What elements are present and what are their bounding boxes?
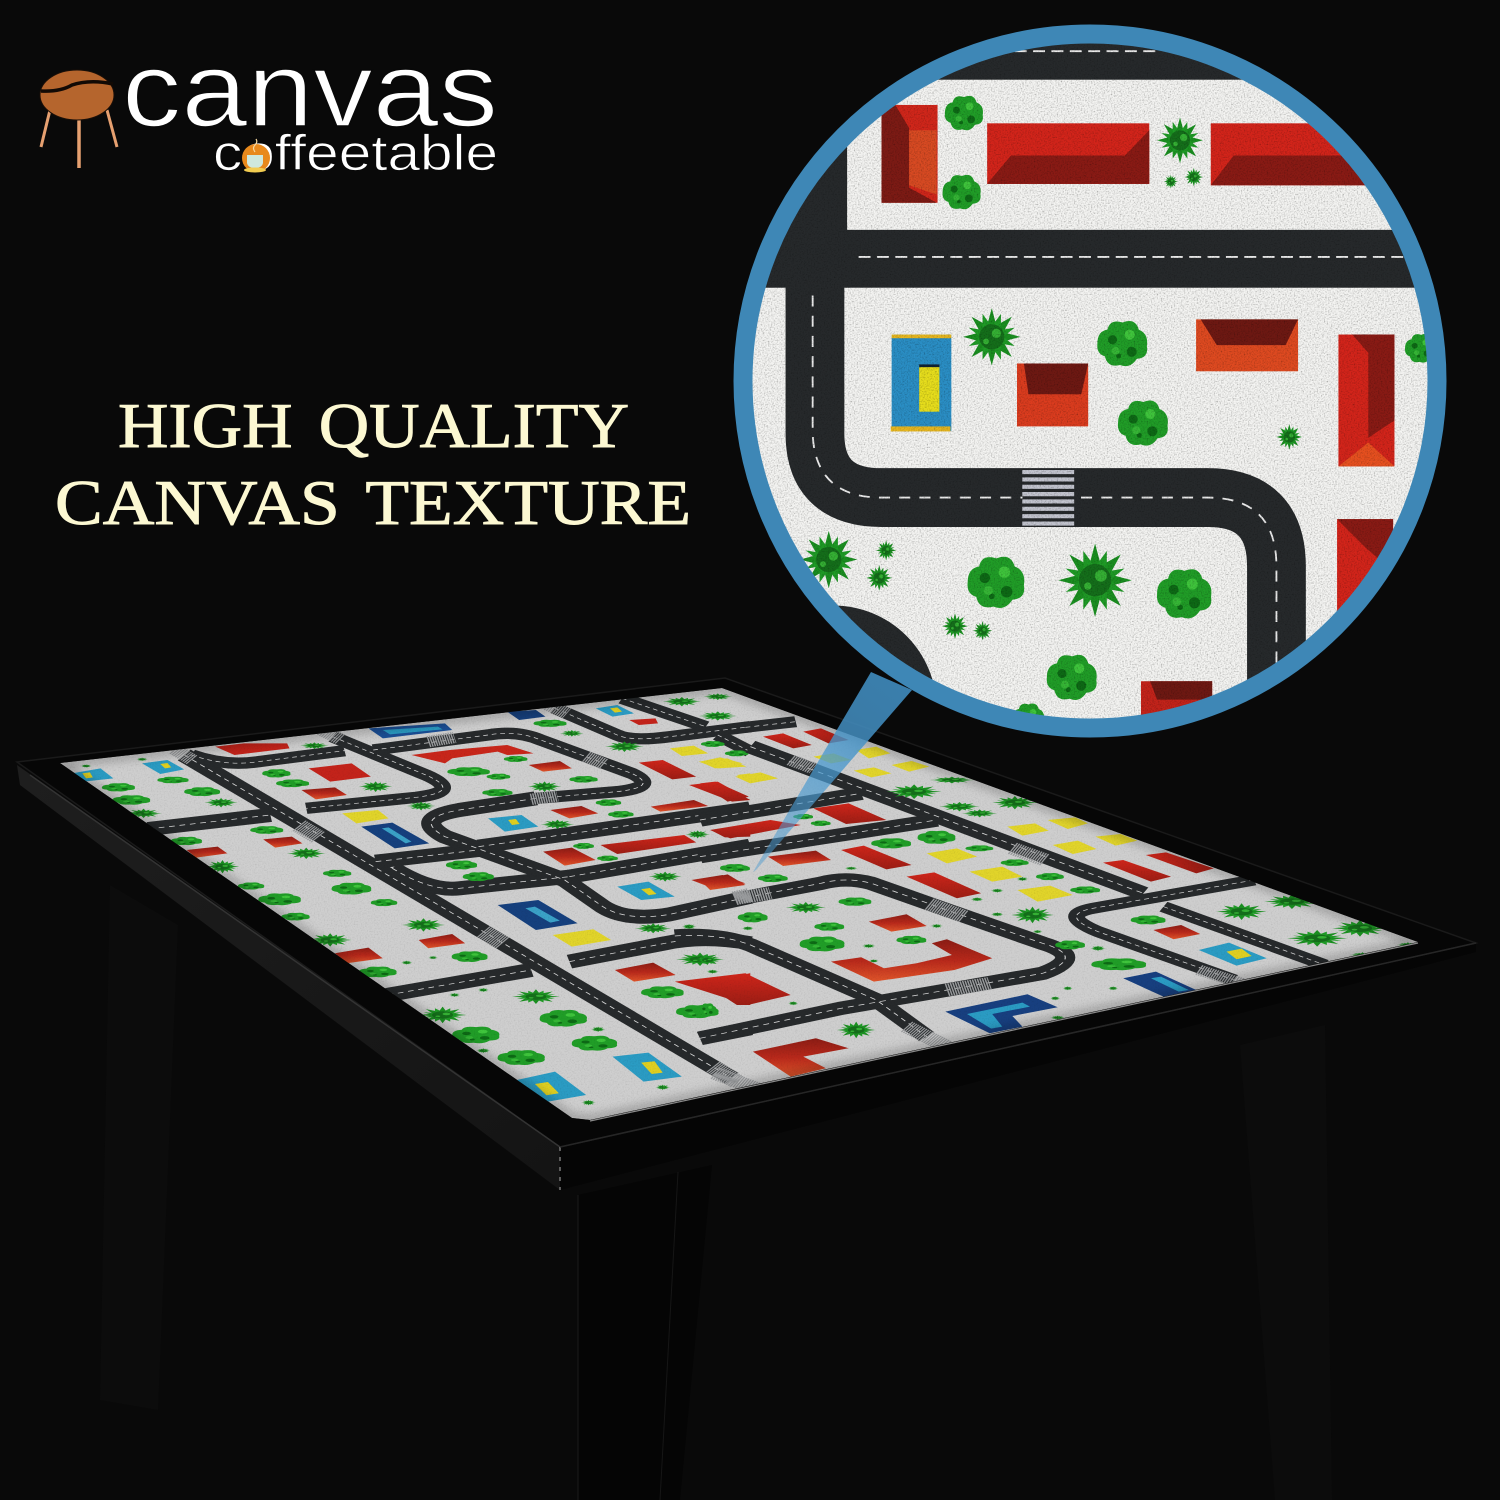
logo wordmark: canvas: canvas [122,31,498,149]
table frame [17,678,1476,1190]
roads left half [148,698,750,1082]
map left half [72,693,750,1105]
magnifier lens [734,24,1446,738]
logo icon: coffee cup [242,139,270,172]
trees right half [695,777,1419,1038]
lens blue ring [743,34,1437,728]
heading line 1: HIGH QUALITY [118,390,629,461]
zoomed map detail [752,44,1428,718]
zoomed trees [800,96,1437,732]
logo wordmark: coffeetable: coffeetable [213,125,498,181]
logo [40,31,498,181]
houses right half [675,728,1267,1077]
map right half [675,722,1419,1088]
heading line 2: CANVAS TEXTURE [55,467,691,538]
roads right half [675,722,1325,1088]
callout beam from lens to table [753,672,912,872]
logo icon: coffee bean table [40,70,117,168]
zoomed red roof houses [882,105,1394,718]
table legs [100,885,1332,1500]
table top: city road map print [60,688,1418,1120]
trees left half [80,693,749,1105]
heading [55,390,691,538]
zoomed roads [766,44,1414,680]
zoomed blue house [891,335,951,431]
houses left half [72,705,750,1102]
surface front edge highlight [590,943,1418,1121]
